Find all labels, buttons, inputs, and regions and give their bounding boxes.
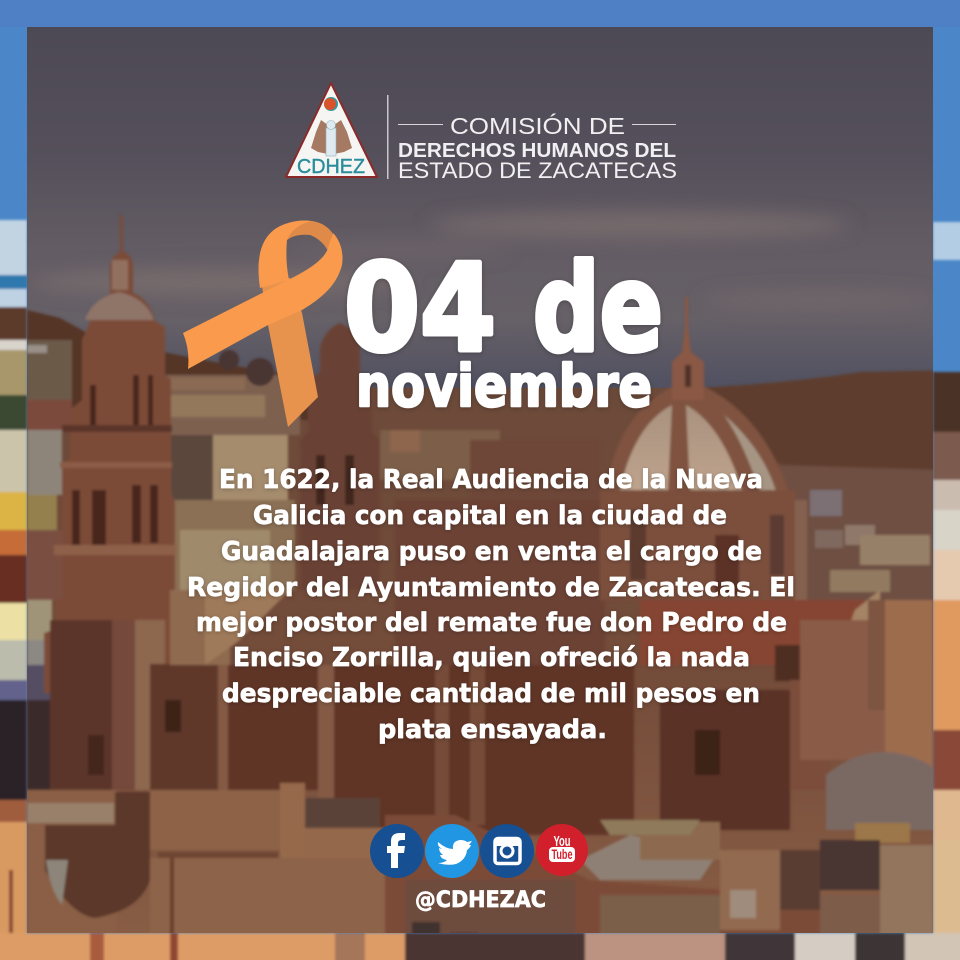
icon: emblem sun and heart: [324, 97, 338, 111]
social media icons: [370, 824, 588, 878]
icon: youtube: You: [554, 833, 570, 850]
body text: Enciso Zorrilla, quien ofreció la nada: [233, 643, 750, 673]
lower centre and rooftops: [385, 815, 860, 940]
grey arched tank: [826, 752, 945, 830]
body text: mejor postor del remate fue don Pedro de: [196, 608, 787, 638]
subtitle: noviembre: noviembre: [356, 352, 652, 420]
CDHEZ wordmark: CDHEZ: [297, 155, 365, 178]
body text: plata ensayada.: [378, 715, 607, 745]
icon: youtube: Tube: [552, 846, 573, 862]
tower base: [50, 620, 135, 790]
icon: hands sheltering person: [311, 120, 352, 156]
logo divider: [387, 95, 388, 179]
title: 04 de: [344, 240, 663, 379]
icon: youtube: [536, 824, 588, 876]
organization name: DERECHOS HUMANOS DEL: [398, 140, 676, 162]
icon: instagram: [480, 824, 534, 878]
icon: facebook: [370, 824, 424, 878]
body text: Guadalajara puso en venta el cargo de: [221, 537, 762, 567]
left side block: [27, 340, 72, 430]
central lower facade: [150, 664, 220, 794]
icon: orange awareness ribbon: [183, 220, 343, 427]
icon: twitter: [425, 824, 479, 878]
organization name: ESTADO DE ZACATECAS: [398, 158, 677, 183]
red pediment wall: [640, 600, 885, 665]
left tower: [44, 215, 181, 693]
church body under dome: [600, 490, 795, 600]
hills: [27, 310, 320, 420]
body text: En 1622, la Real Audiencia de la Nueva: [219, 465, 763, 495]
foreground wall left: [27, 790, 117, 940]
second tower: [300, 323, 380, 590]
organization name: [398, 113, 677, 183]
body text: [187, 465, 795, 745]
social handle: @CDHEZAC: [415, 888, 546, 913]
organization name: COMISIÓN DE: [450, 113, 625, 139]
dome: [606, 380, 790, 495]
mid town left: [165, 375, 300, 435]
body text: Regidor del Ayuntamiento de Zacatecas. El: [187, 573, 795, 603]
body text: despreciable cantidad de mil pesos en: [222, 679, 760, 709]
logo: CDHEZ triangle emblem: [286, 83, 377, 178]
title: 04 de: de: [533, 240, 663, 379]
title: 04 de: 04: [344, 240, 496, 379]
body text: Galicia con capital en la ciudad de: [253, 501, 727, 531]
